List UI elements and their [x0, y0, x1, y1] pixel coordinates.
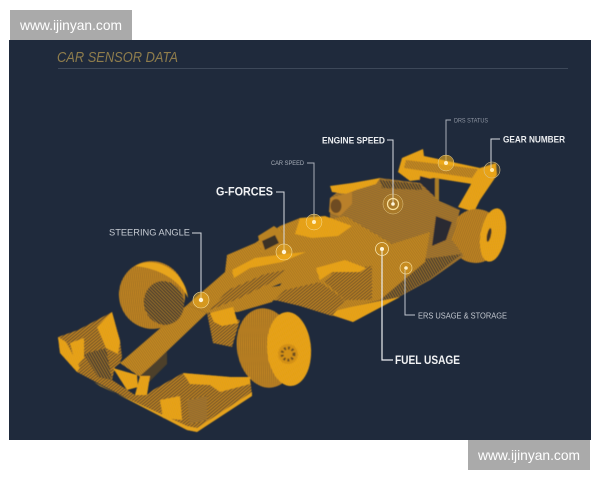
leader: car speed: [307, 163, 314, 220]
floor and rear suspension: [300, 200, 464, 322]
sensor marker: g-forces: [276, 244, 292, 260]
watermark: bottom: www.ijinyan.com: [477, 447, 580, 463]
sidepod: [270, 216, 430, 312]
front-left wheel: [111, 254, 193, 336]
label: gear number: GEAR NUMBER: [503, 134, 565, 146]
watermark: bottom: [468, 440, 590, 470]
label: ers usage and storage: ERS USAGE & STORAGE: [418, 312, 507, 320]
sensor marker: ers usage: [400, 262, 412, 274]
rear wheel: [445, 204, 510, 268]
watermark: top: [10, 10, 132, 40]
sensor marker: engine speed: [383, 194, 403, 214]
leader: drs status: [446, 120, 451, 162]
label: drs status: DRS STATUS: [454, 118, 488, 124]
nose: [120, 305, 207, 377]
front suspension: [207, 313, 240, 347]
leader: fuel usage: [382, 251, 393, 360]
leader: gear number: [491, 139, 500, 168]
leader: engine speed: [387, 140, 393, 203]
watermark: top: www.ijinyan.com: [19, 17, 122, 33]
rear wing: [398, 149, 497, 212]
sensor marker: drs status: [438, 155, 454, 171]
engine cover: [330, 178, 438, 242]
leader: steering angle: [192, 233, 201, 298]
front wing: [58, 312, 252, 432]
front-right wheel: [230, 304, 314, 392]
leader: g-forces: [276, 192, 284, 250]
label: steering angle: STEERING ANGLE: [109, 228, 190, 238]
label: fuel usage: FUEL USAGE: [395, 355, 460, 367]
sensor marker: car speed: [306, 214, 322, 230]
sensor marker: fuel usage: [376, 242, 388, 256]
sensor marker: gear number: [484, 162, 500, 178]
sensor marker: steering angle: [193, 292, 209, 308]
label: g-forces: G-FORCES: [216, 184, 273, 198]
leader: ers usage: [405, 270, 415, 315]
illustration: wireframe race car: [58, 149, 510, 432]
label: car speed: CAR SPEED: [271, 160, 304, 167]
labels: [109, 118, 565, 367]
label: engine speed: ENGINE SPEED: [322, 136, 385, 146]
title: CAR SENSOR DATA: [57, 50, 178, 66]
cockpit and monocoque: [187, 218, 345, 313]
